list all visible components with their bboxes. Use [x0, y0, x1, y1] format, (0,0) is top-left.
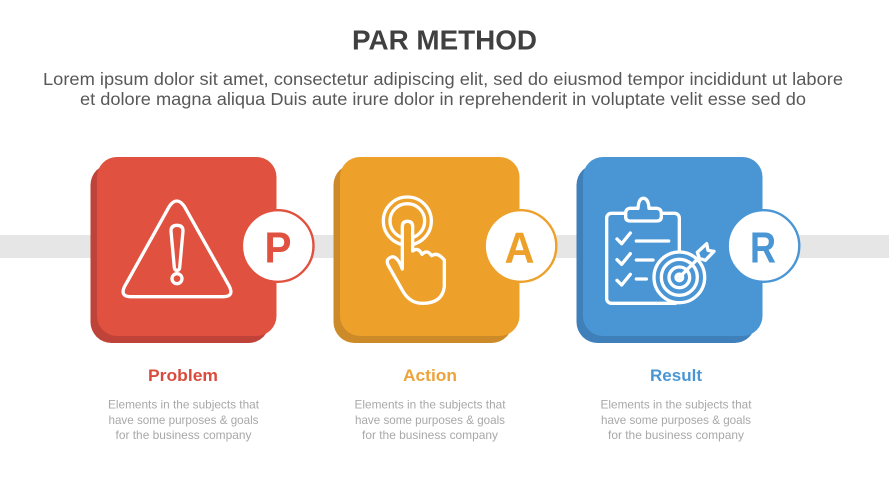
description: result: have some purposes & goals — [601, 413, 751, 427]
description: action — [354, 398, 506, 442]
icon: clipboard and target — [607, 198, 714, 303]
icon: warning triangle — [123, 201, 231, 297]
description: problem: for the business company — [116, 428, 252, 442]
panel: action — [334, 157, 556, 442]
badge: R — [728, 210, 799, 282]
description: result: Elements in the subjects that — [600, 398, 752, 412]
description: action: for the business company — [362, 428, 498, 442]
description: action: have some purposes & goals — [355, 413, 505, 427]
connector band — [0, 235, 889, 258]
badge: P — [242, 210, 314, 282]
card: result — [576, 157, 762, 343]
subtitle text block: Lorem ipsum dolor sit amet, consectetur adipiscing elit, sed do eiusmod tempor incididunt ut labore — [43, 69, 843, 89]
description: problem — [108, 398, 260, 442]
label: Problem: Problem — [148, 366, 218, 385]
panel: result — [576, 157, 799, 442]
title: PAR METHOD — [352, 24, 537, 56]
label: Result: Result — [650, 366, 702, 385]
description: action: Elements in the subjects that — [354, 398, 506, 412]
subtitle text block — [43, 69, 843, 109]
description: result — [600, 398, 752, 442]
subtitle text block: et dolore magna aliqua Duis aute irure dolor in reprehenderit in voluptate velit esse sed do — [80, 89, 806, 109]
panel: problem — [90, 157, 314, 442]
badge: R: R — [750, 223, 776, 272]
description: result: for the business company — [608, 428, 744, 442]
card: problem — [90, 157, 276, 343]
label: Action: Action — [403, 366, 457, 385]
description: problem: have some purposes & goals — [108, 413, 258, 427]
badge: A: A — [504, 223, 534, 272]
description: problem: Elements in the subjects that — [108, 398, 260, 412]
card: action — [334, 157, 520, 343]
badge: P: P — [264, 223, 292, 272]
icon: tapping hand — [383, 197, 444, 303]
badge: A — [485, 210, 556, 282]
